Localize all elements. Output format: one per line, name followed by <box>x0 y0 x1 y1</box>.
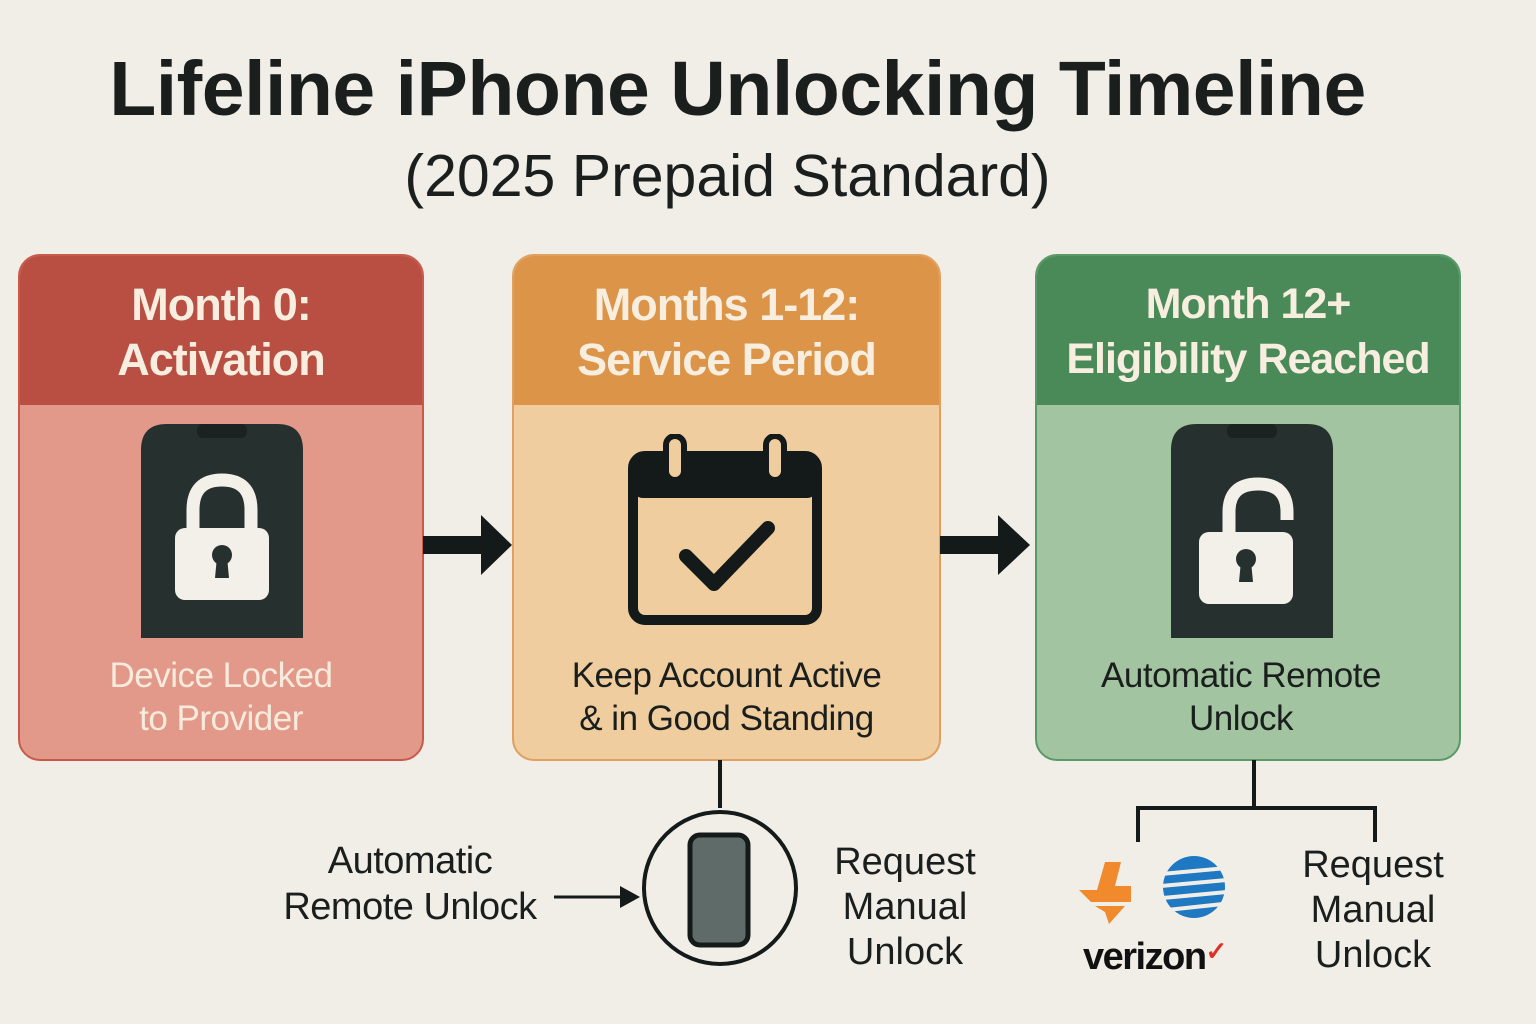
icon: phone in circle <box>642 810 798 966</box>
title: Lifeline iPhone Unlocking Timeline <box>109 46 1366 132</box>
panel heading <box>1037 256 1459 405</box>
text: request manual unlock (right): Manual <box>1311 889 1435 931</box>
text: automatic remote unlock: Automatic <box>328 840 492 882</box>
panel: month 12+ eligibility <box>1035 254 1461 761</box>
text: request manual unlock (middle): Unlock <box>847 931 963 973</box>
text: request manual unlock (right) <box>1302 844 1444 976</box>
caption: & in Good Standing <box>579 699 874 738</box>
panel heading <box>514 256 939 405</box>
panel heading: Month 0: <box>131 278 311 330</box>
panel: month 0 activation <box>18 254 424 761</box>
panel: months 1-12 service period <box>512 254 941 761</box>
caption: Keep Account Active <box>572 656 881 695</box>
caption <box>1101 656 1381 738</box>
subtitle: (2025 Prepaid Standard) <box>404 143 1051 209</box>
arrow 2 <box>940 515 1030 575</box>
icon: orange logo <box>1079 862 1131 924</box>
text: request manual unlock (middle): Request <box>834 841 976 883</box>
logos: carriers <box>1079 856 1226 978</box>
arrow: to phone circle <box>554 886 640 908</box>
panel heading <box>20 256 422 405</box>
panel heading: Eligibility Reached <box>1066 334 1430 382</box>
text: request manual unlock (right): Request <box>1302 844 1444 886</box>
icon: unlocked phone <box>1171 424 1333 638</box>
text: request manual unlock (middle): Manual <box>843 886 967 928</box>
caption <box>572 656 881 738</box>
panel heading: Activation <box>117 334 325 384</box>
caption: Unlock <box>1189 699 1293 738</box>
caption: Automatic Remote <box>1101 656 1381 695</box>
text: automatic remote unlock <box>283 840 538 928</box>
panel heading: Month 12+ <box>1146 280 1350 328</box>
icon: locked phone <box>141 424 303 638</box>
icon: AT&T globe <box>1163 856 1225 918</box>
icon: calendar check <box>628 434 822 625</box>
caption <box>109 656 333 738</box>
text: request manual unlock (middle) <box>834 841 976 973</box>
caption: to Provider <box>139 699 303 738</box>
text: automatic remote unlock: Remote Unlock <box>283 886 537 928</box>
caption: Device Locked <box>109 656 333 695</box>
panel heading: Service Period <box>577 334 876 384</box>
panel heading: Months 1-12: <box>594 278 859 330</box>
text: verizon: verizon✓ <box>1083 936 1226 978</box>
connector lines <box>718 760 1377 842</box>
text: request manual unlock (right): Unlock <box>1315 934 1431 976</box>
arrow 1 <box>423 515 512 575</box>
